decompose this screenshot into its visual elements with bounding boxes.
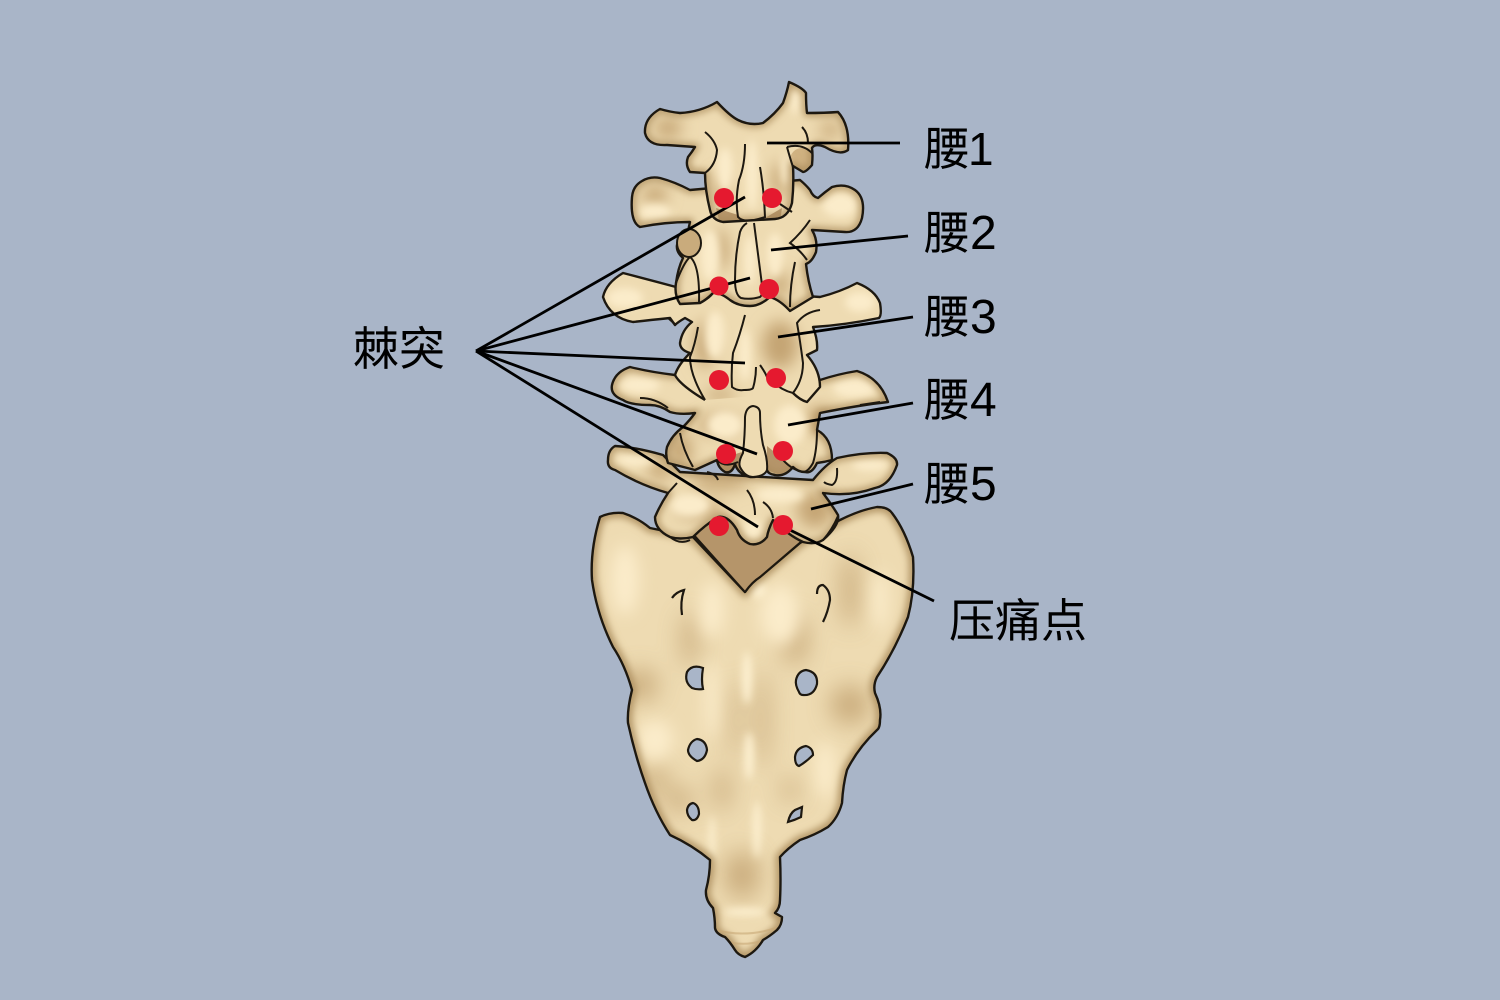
vertebra L1 bbox=[645, 82, 848, 224]
label: L5: 腰5 bbox=[924, 458, 997, 511]
leader lines: lumbar labels bbox=[767, 143, 913, 509]
leader line: tender point bbox=[790, 530, 934, 601]
left articular process bbox=[677, 229, 701, 257]
vertebra L5 bbox=[608, 446, 897, 544]
label: tender point: 压痛点 bbox=[949, 595, 1087, 647]
label: L2: 腰2 bbox=[924, 207, 997, 260]
vertebra L4 bbox=[612, 367, 888, 477]
sacrum bbox=[592, 507, 913, 957]
sacral crest lines bbox=[672, 585, 830, 622]
label: L3: 腰3 bbox=[924, 291, 997, 344]
label: L1: 腰1 bbox=[924, 123, 994, 175]
label: spinous process: 棘突 bbox=[353, 323, 445, 375]
vertebra L3 bbox=[603, 273, 881, 402]
sacral foramina bbox=[686, 667, 817, 822]
leader lines: spinous process bbox=[476, 197, 758, 527]
label: L4: 腰4 bbox=[924, 374, 997, 427]
vertebra L2 bbox=[632, 177, 863, 311]
tender points bbox=[709, 188, 793, 536]
spinal canal gap bbox=[693, 505, 802, 592]
coccyx tip bands bbox=[716, 928, 776, 944]
